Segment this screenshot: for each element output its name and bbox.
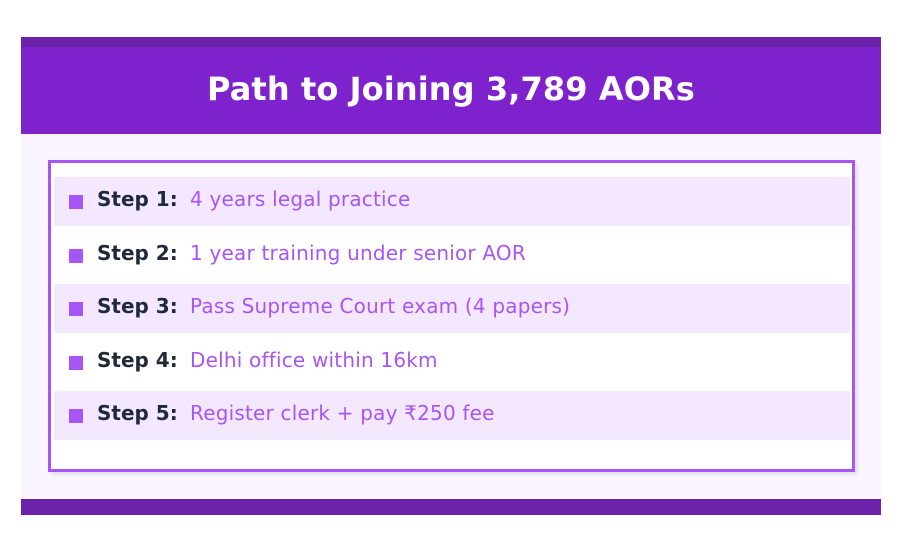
step 3 [54, 284, 850, 333]
step 1: 4 years legal practice [190, 187, 410, 211]
step 3: Pass Supreme Court exam (4 papers) [190, 294, 570, 318]
step 2: Step 2: [97, 241, 178, 265]
step 3: Step 3: [97, 294, 178, 318]
step 2: 1 year training under senior AOR [190, 241, 526, 265]
title: Path to Joining 3,789 AORs [207, 70, 695, 108]
step 5: Register clerk + pay ₹250 fee [190, 401, 495, 425]
top strip [21, 37, 881, 47]
step 5 [54, 391, 850, 440]
step 5: Step 5: [97, 401, 178, 425]
step 4 [69, 348, 438, 372]
step 4: Delhi office within 16km [190, 348, 438, 372]
step 1: Step 1: [97, 187, 178, 211]
panel: steps [48, 160, 855, 472]
step 1 [54, 177, 850, 226]
header [21, 47, 881, 134]
step 4: Step 4: [97, 348, 178, 372]
bottom bar [21, 499, 881, 515]
